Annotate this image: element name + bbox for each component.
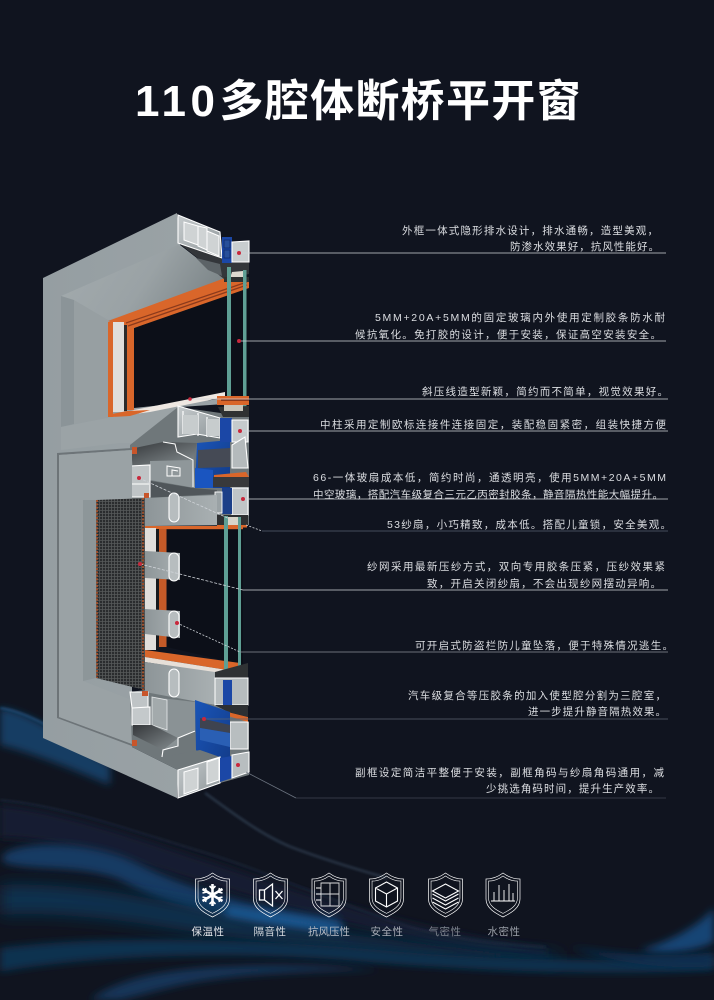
flyscreen mesh	[96, 498, 145, 690]
bottom sash rail	[145, 662, 215, 705]
transom profile	[178, 406, 220, 438]
callout text 4: 中柱采用定制欧标连接件连接固定，装配稳固紧密，组装快捷方便	[320, 418, 666, 431]
lower shaded band	[133, 725, 178, 750]
bottom orange bands	[145, 650, 240, 672]
callout text 5: 66-一体玻扇成本低，简约时尚，通透明亮，使用5MM+20A+5MM	[313, 471, 666, 484]
upper opening sill	[61, 405, 178, 450]
callout text 5: 中空玻璃，搭配汽车级复合三元乙丙密封胶条，静音隔热性能大幅提升。	[313, 488, 663, 501]
dark strip	[124, 325, 127, 411]
lower section base	[130, 690, 249, 783]
lintel profiles	[180, 244, 249, 279]
icon: thermal insulation snowflake	[196, 873, 230, 917]
orange frame top	[108, 278, 249, 328]
callout text 7: 纱网采用最新压纱方式，双向专用胶条压紧，压纱效果紧	[367, 560, 665, 573]
sash dark band	[145, 480, 217, 498]
transom right profiles	[232, 420, 248, 442]
orange frame left	[108, 322, 113, 417]
lower opening glass	[167, 529, 243, 665]
title: 110多腔体断桥平开窗	[135, 77, 582, 126]
callout text 6: 53纱扇，小巧精致，成本低。搭配儿童锁，安全美观。	[387, 518, 671, 531]
orange frame stripes	[126, 282, 247, 326]
callout markers	[137, 251, 245, 767]
callout text 8: 可开启式防盗栏防儿童坠落，便于特殊情况逃生。	[415, 639, 673, 652]
upper opening inner reveal	[74, 300, 112, 424]
callout text 9	[408, 689, 666, 718]
callout text 7: 致，开启关闭纱扇，不会出现纱网摆动异响。	[427, 577, 661, 590]
lower glass panes	[224, 516, 228, 676]
mesh orange edges	[96, 500, 98, 678]
label: safety: 安全性	[370, 925, 404, 938]
lower sash profiles	[130, 692, 148, 708]
icon: sound insulation speaker	[254, 873, 288, 917]
icon: wind pressure resistance	[312, 873, 346, 917]
callout text 2: 候抗氧化。免打胶的设计，便于安装，保证高空安装安全。	[355, 328, 661, 341]
right upper bead of lower sash	[217, 515, 248, 526]
callout text 10: 副框设定简洁平整便于安装，副框角码与纱扇角码通用，减	[355, 766, 664, 779]
callout text 2: 5MM+20A+5MM的固定玻璃内外使用定制胶条防水耐	[375, 311, 666, 324]
callout text 9: 进一步提升静音隔热效果。	[528, 705, 666, 718]
icon: water tightness bars	[486, 873, 520, 917]
label: water tightness: 水密性	[488, 925, 520, 938]
lower opening reveal	[83, 500, 96, 681]
transom section base	[130, 407, 249, 526]
window cross-section illustration	[43, 213, 250, 798]
callout text 3: 斜压线造型新颖，简约而不简单，视觉效果好。	[422, 385, 668, 398]
upper glass panes	[227, 267, 231, 410]
upper opening soffit	[61, 245, 226, 320]
bottom right profiles	[215, 678, 248, 705]
callout text 1	[402, 224, 659, 253]
white liner	[113, 322, 124, 412]
wall face	[43, 213, 225, 798]
callout text 2	[355, 311, 666, 341]
sill streak	[112, 392, 225, 417]
sash light profile	[150, 460, 195, 488]
icon: air tightness layers	[428, 873, 462, 917]
lower blue zone	[195, 700, 230, 777]
callout text 5	[313, 471, 666, 501]
callout text 7	[367, 560, 665, 590]
transom blue	[195, 440, 230, 488]
label: thermal insulation: 保温性	[192, 925, 224, 938]
lower opening wall	[59, 450, 132, 744]
callout text 1: 防渗水效果好，抗风性能好。	[510, 240, 659, 253]
sill profiles	[178, 757, 220, 798]
sash rail 3	[145, 609, 180, 638]
orange inner	[127, 327, 134, 410]
callout text 1: 外框一体式隐形排水设计，排水通畅，造型美观，	[402, 224, 658, 237]
small sash profile	[130, 465, 150, 497]
icon: safety cube	[370, 873, 404, 917]
label: sound insulation: 隔音性	[254, 925, 286, 938]
label: wind pressure resistance: 抗风压性	[308, 925, 350, 938]
background: blue waves	[0, 708, 714, 1000]
transom orange	[217, 396, 249, 405]
upper opening left reveal	[61, 296, 74, 427]
lower grey panel	[152, 697, 195, 750]
transom orange bar	[214, 472, 249, 477]
label: air tightness: 气密性	[428, 925, 462, 938]
leader lines	[139, 253, 668, 798]
glass opening dark	[134, 285, 250, 408]
bottom right top bead	[215, 663, 248, 678]
lower wall rebate line	[57, 448, 132, 746]
sash rail 1	[145, 495, 217, 526]
callout text 9: 汽车级复合等压胶条的加入使型腔分割为三腔室，	[408, 689, 666, 702]
sash top shaded band	[130, 442, 197, 465]
callout text 10: 少挑选角码时间，提升生产效率。	[486, 782, 659, 795]
sash rail 2	[145, 551, 180, 580]
callout text 10	[355, 766, 664, 795]
transom top glazing bead	[218, 406, 249, 417]
